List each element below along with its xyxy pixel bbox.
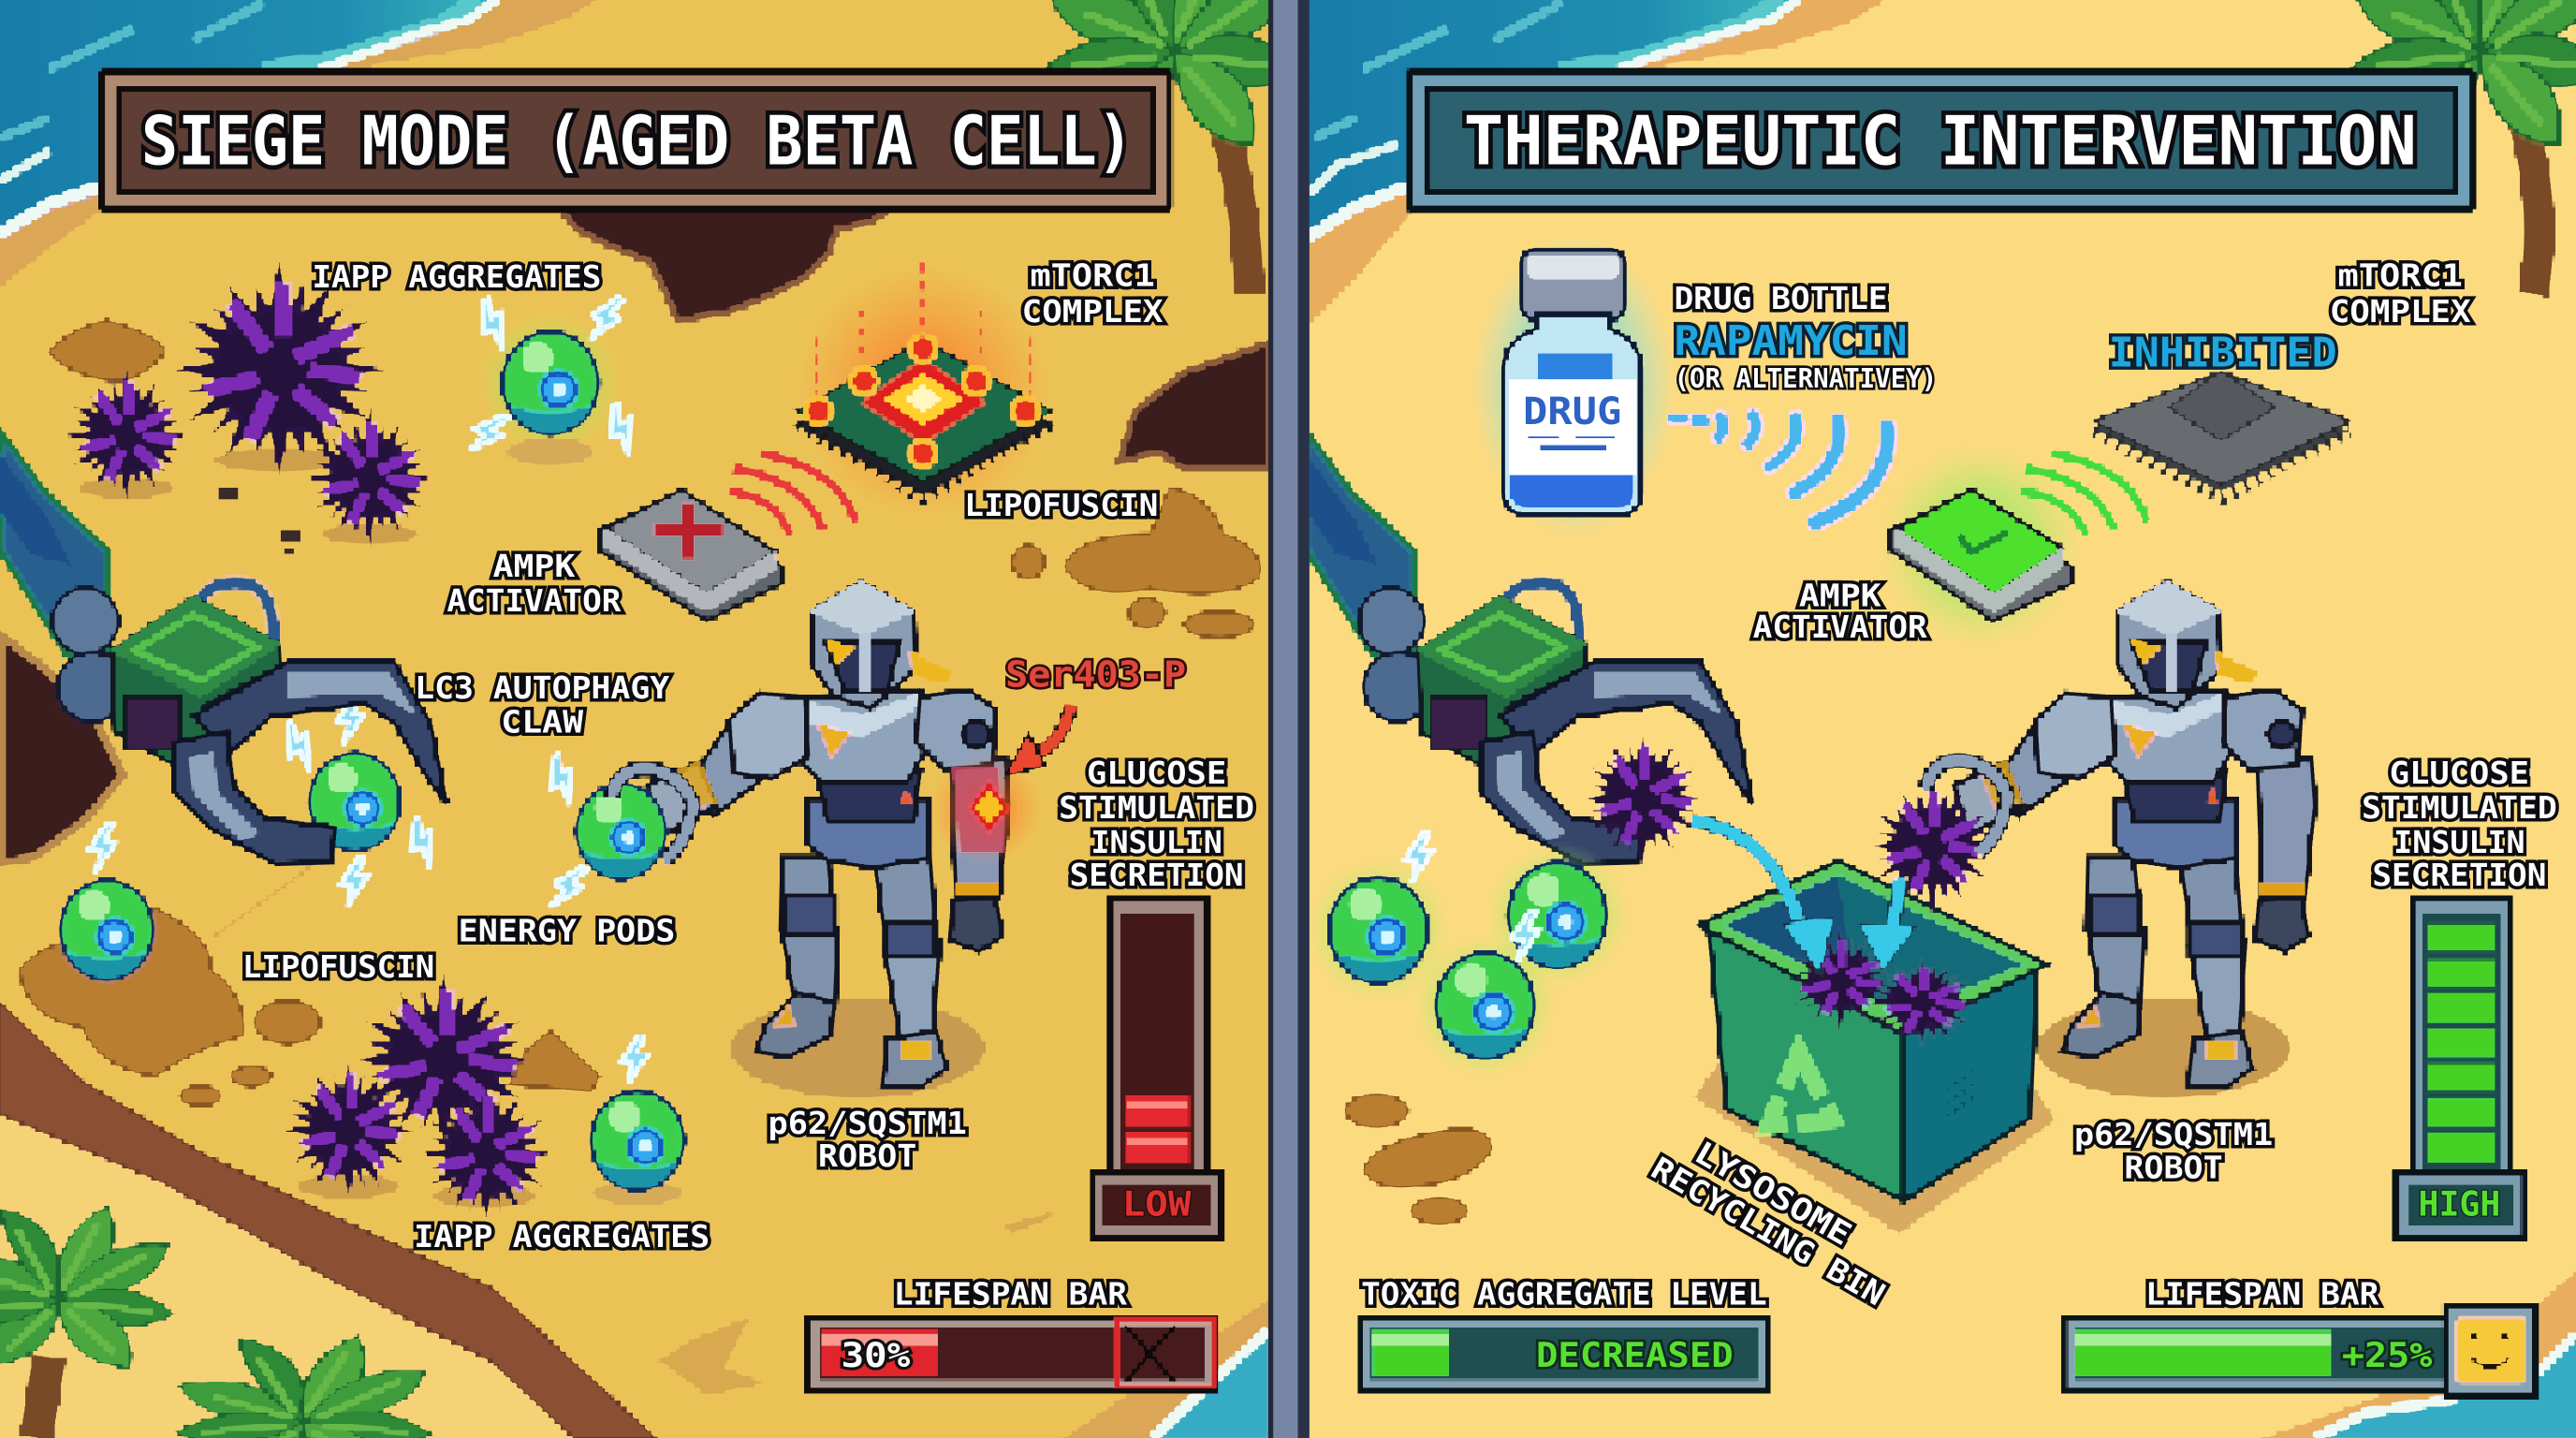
energy pod in claw	[273, 695, 447, 907]
label: mTORC1 complex right: mTORC1	[2338, 257, 2463, 293]
label: glucose stimulated insulin secretion right: SECRETION	[2372, 857, 2546, 893]
beach: lower-left lighter sand	[0, 1101, 575, 1438]
label: Ser403-P: Ser403-P	[1005, 654, 1186, 697]
energy pods right	[1306, 833, 1630, 1078]
lifespan bar right	[2063, 1318, 2458, 1390]
label: drug bottle rapamycin: RAPAMYCIN	[1674, 317, 1908, 365]
inhibited mTORC1 chip	[2093, 372, 2351, 500]
lifespan value: +25%: +25%	[2342, 1335, 2432, 1375]
cliff path lower left	[0, 1003, 657, 1438]
energy pod held by robot	[538, 752, 694, 916]
wet sand top-right panel	[1310, 0, 1888, 325]
label: LC3 autophagy claw	[415, 669, 669, 741]
label: drug bottle rapamycin	[1674, 280, 1937, 394]
gauge: glucose stimulated insulin secretion high	[2397, 899, 2525, 1238]
energy pod on lipofuscin	[57, 823, 156, 983]
smiley icon	[2446, 1306, 2537, 1395]
label: AMPK activator: ACTIVATOR	[446, 582, 622, 619]
foam top-left	[0, 0, 496, 233]
sea top-right panel	[1310, 0, 1797, 240]
panel: left sand background	[0, 0, 1268, 1438]
claw right	[1306, 431, 1753, 864]
label: lysosome recycling bin: RECYCLING BIN	[1646, 1150, 1891, 1313]
label: drug bottle rapamycin: DRUG BOTTLE	[1674, 280, 1888, 316]
label: lifespan bar: LIFESPAN BAR	[894, 1275, 1128, 1312]
palm tree top-right right panel	[2353, 0, 2576, 296]
gauge text: low: LOW	[1122, 1184, 1192, 1225]
center divider	[1268, 0, 1310, 1438]
debris	[217, 486, 302, 553]
AMPK button inactive	[600, 490, 782, 621]
dark pit left	[0, 633, 124, 864]
label: mTORC1 complex right	[2330, 257, 2471, 330]
label: AMPK activator right	[1753, 578, 1928, 645]
energy pod bottom	[588, 1035, 687, 1206]
overheating mTORC1 chip	[795, 263, 1051, 520]
title plaque: therapeutic intervention	[1406, 67, 2476, 213]
label: glucose stimulated insulin secretion: GLUCOSE	[1087, 755, 1226, 791]
label: IAPP aggregates lower: IAPP AGGREGATES	[414, 1218, 710, 1255]
label: p62 robot right: ROBOT	[2124, 1149, 2223, 1185]
sea bottom-right panel	[2258, 1270, 2576, 1438]
label: toxic aggregate level: TOXIC AGGREGATE LEVEL	[1361, 1275, 1767, 1312]
palm tree bottom	[176, 1336, 432, 1438]
label: p62 robot: ROBOT	[818, 1137, 916, 1174]
label: lysosome recycling bin: LYSOSOME	[1689, 1134, 1858, 1253]
cracks in sand	[213, 855, 1051, 1397]
label: energy pods: ENERGY PODS	[459, 913, 675, 949]
title text: therapeutic intervention: THERAPEUTIC INTERVENTION	[1464, 102, 2417, 181]
lysosome recycling bin	[1692, 861, 2056, 1236]
aggregate in robot hand	[1860, 760, 2008, 918]
label: AMPK activator right: AMPK	[1799, 578, 1881, 614]
gauge text: high: HIGH	[2419, 1184, 2500, 1225]
IAPP aggregates top cluster	[56, 255, 442, 550]
label: glucose stimulated insulin secretion: INSULIN	[1090, 824, 1222, 860]
toxic level value: decreased: DECREASED	[1536, 1335, 1734, 1375]
label: LC3 autophagy claw: CLAW	[501, 704, 584, 741]
foam top-right panel	[1310, 0, 1797, 237]
label: lipofuscin lower: LIPOFUSCIN	[242, 948, 434, 985]
sea top-left	[0, 0, 496, 240]
label: LC3 autophagy claw: LC3 AUTOPHAGY	[415, 669, 669, 706]
aggregates inside bin	[1780, 929, 1982, 1049]
label: glucose stimulated insulin secretion	[1059, 755, 1254, 893]
red arrow	[1005, 703, 1071, 775]
label: glucose stimulated insulin secretion: SECRETION	[1070, 857, 1244, 893]
label: AMPK activator right: ACTIVATOR	[1753, 609, 1928, 645]
lifespan value: 30%: 30%	[842, 1335, 910, 1375]
green signal waves	[2019, 453, 2147, 536]
dark pit top	[559, 209, 896, 322]
panel: right sand background	[1310, 0, 2576, 1438]
label: AMPK activator	[446, 548, 622, 619]
lifespan bar left	[809, 1318, 1216, 1390]
label: glucose stimulated insulin secretion right	[2362, 755, 2557, 893]
label: mTORC1 complex: COMPLEX	[1022, 293, 1164, 330]
label: AMPK activator: AMPK	[493, 548, 575, 584]
red damaged arm with Ser403 glow	[929, 753, 1042, 864]
label: mTORC1 complex right: COMPLEX	[2330, 293, 2471, 330]
cyan arrows into bin	[1692, 822, 1915, 973]
lipofuscin blobs left panel	[20, 320, 1260, 1106]
bottle label text: drug: DRUG	[1523, 389, 1621, 433]
dark pit right	[1117, 342, 1268, 470]
label: drug bottle rapamycin: (OR ALTERNATIVEY)	[1674, 363, 1937, 394]
label: glucose stimulated insulin secretion right: GLUCOSE	[2390, 755, 2529, 791]
label: p62 robot right: p62/SQSTM1	[2074, 1116, 2273, 1152]
red signal waves	[728, 453, 856, 536]
AMPK button active	[1878, 444, 2082, 647]
energy pod top	[462, 291, 646, 466]
IAPP aggregates bottom cluster	[274, 967, 561, 1227]
robot right	[1954, 581, 2315, 1099]
label: mTORC1 complex: mTORC1	[1030, 257, 1155, 293]
sea bottom-right of left panel	[1060, 1298, 1268, 1438]
label: lipofuscin: LIPOFUSCIN	[964, 487, 1158, 523]
label: lifespan bar right: LIFESPAN BAR	[2145, 1275, 2379, 1312]
claw left	[0, 431, 446, 864]
robot left	[648, 581, 1009, 1099]
label: glucose stimulated insulin secretion right: INSULIN	[2393, 824, 2525, 860]
label: mTORC1 complex	[1022, 257, 1164, 330]
label: inhibited: INHIBITED	[2109, 329, 2337, 376]
label: p62 robot right	[2074, 1116, 2273, 1185]
label: glucose stimulated insulin secretion: STIMULATED	[1059, 789, 1254, 826]
label: IAPP aggregates: IAPP AGGREGATES	[312, 258, 601, 295]
toxic aggregate level bar	[1360, 1318, 1767, 1390]
palm tree top-right left panel	[1046, 0, 1302, 296]
wet sand top-left	[0, 0, 600, 289]
title text: siege mode: SIEGE MODE (AGED BETA CELL)	[141, 102, 1134, 181]
gauge: glucose stimulated insulin secretion low	[1092, 899, 1222, 1238]
title plaque: siege mode	[98, 67, 1173, 213]
palm tree bottom-left	[0, 1207, 174, 1438]
aggregate in claw	[1573, 727, 1713, 869]
label: p62 robot	[768, 1105, 967, 1174]
label: glucose stimulated insulin secretion right: STIMULATED	[2362, 789, 2557, 826]
label: p62 robot: p62/SQSTM1	[768, 1105, 967, 1141]
rapamycin waves	[1673, 416, 1888, 522]
drug bottle	[1472, 235, 1676, 537]
lipofuscin blobs right panel	[1345, 1094, 1492, 1224]
